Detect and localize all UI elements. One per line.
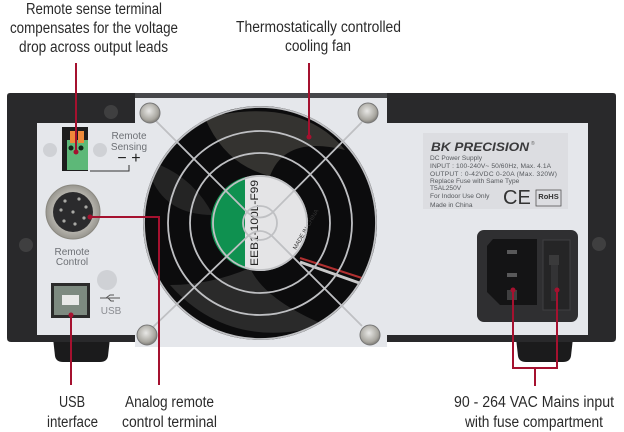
USB panel label: USB [101,306,122,317]
USB callout line [70,315,72,385]
fan hub sticker [211,175,320,271]
mains callout line [513,290,557,386]
label: remote sense terminal: compensates for the voltage [10,20,178,37]
label: USB interface [47,394,98,431]
CE mark: CE [503,187,531,209]
chassis screw top [104,105,118,119]
fan callout line [308,63,310,137]
remote control panel label: Control [56,257,88,268]
USB panel label [100,295,122,317]
rating label: Replace Fuse with Same Type [430,178,520,185]
label: USB interface: interface [47,414,98,431]
remote sense callout line [75,63,77,152]
remote sensing panel label [111,131,147,167]
power supply rear panel [7,93,616,362]
remote control panel label: Remote [54,247,90,258]
RoHS mark: RoHS [538,192,559,201]
rating label: INPUT : 100-240V~ 50/60Hz, Max. 4.1A [430,163,552,170]
rating label: Made in China [430,202,473,209]
cooling fan [143,106,377,340]
remote sensing panel label: Sensing [111,142,147,153]
label: analog remote control terminal: control terminal [122,414,217,431]
remote sensing panel label: − + [117,150,141,167]
label: cooling fan [236,19,401,55]
analog remote callout line [90,217,159,385]
black chassis [7,93,616,342]
label: remote sense terminal [10,1,178,56]
remote control panel label [54,247,90,268]
remote sensing connector [62,127,129,171]
chassis screw right [592,237,606,251]
fan hub sticker: EEB1-100L-F99 [249,180,261,266]
label: mains input: with fuse compartment [464,414,604,431]
remote sensing panel label: Remote [111,131,147,142]
USB port [51,283,90,318]
label: remote sense terminal: Remote sense terminal [26,1,162,18]
mains inlet with fuse compartment [477,230,578,322]
rating label [423,133,568,209]
rating label: DC Power Supply [430,155,483,162]
callout lines [71,63,557,386]
faint panel hex nuts [43,143,117,290]
label: cooling fan: Thermostatically controlled [236,19,401,36]
fan hub sticker: MADE IN CHINA [293,209,320,251]
rubber foot right [516,338,573,362]
label: cooling fan: cooling fan [285,38,351,55]
callout dots [68,134,560,318]
rating label: T5AL250V [430,185,462,192]
rating label: ® [531,140,535,147]
label: mains input [454,394,615,431]
RoHS mark [536,190,561,206]
chassis screw left [19,238,33,252]
guard screws [137,103,380,345]
fan guard wire [144,107,376,339]
rubber foot left [53,338,110,362]
label: remote sense terminal: drop across output leads [19,39,168,56]
label: analog remote control terminal: Analog remote [125,394,214,411]
label: USB interface: USB [59,394,85,411]
remote control connector [46,185,100,239]
rating label: BK PRECISION [431,142,530,154]
light back plate [37,98,588,347]
rating label: For Indoor Use Only [430,193,490,200]
rating label: OUTPUT : 0-42VDC 0-20A (Max. 320W) [430,171,557,178]
label: analog remote control terminal [122,394,217,431]
